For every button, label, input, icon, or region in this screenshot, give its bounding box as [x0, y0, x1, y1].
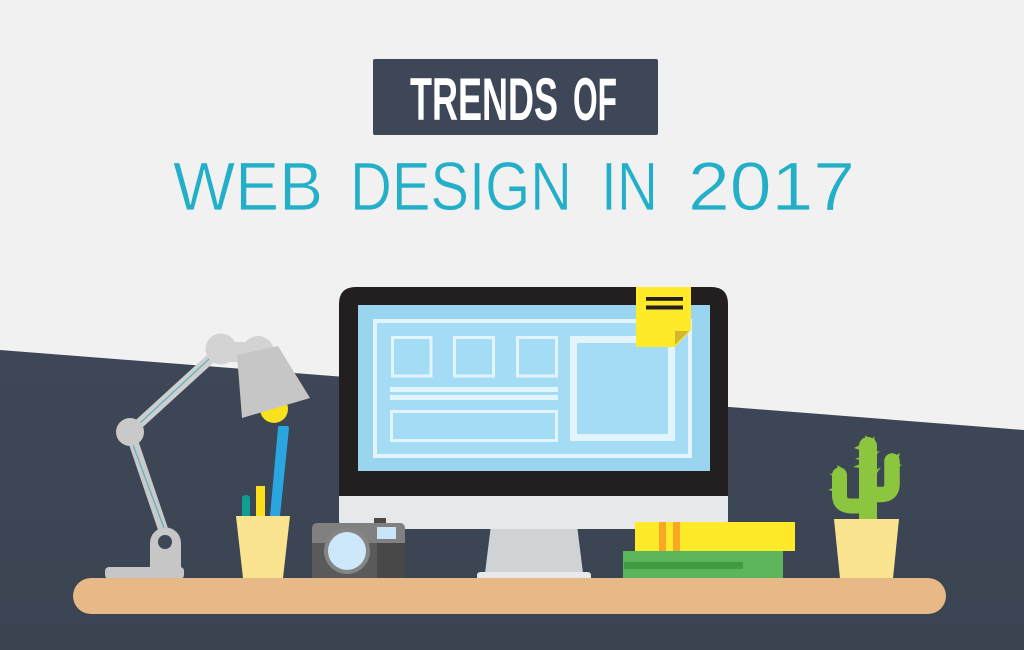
title: trends of: OF — [573, 66, 617, 133]
monitor stand — [477, 525, 591, 578]
camera lens — [324, 528, 370, 574]
desk lamp — [105, 334, 310, 579]
lamp shade — [237, 346, 310, 418]
monitor screen — [358, 305, 710, 471]
subtitle: WEB — [173, 148, 323, 225]
camera right panel — [377, 543, 405, 578]
subtitle: 2017 — [688, 148, 855, 225]
subtitle: DESIGN — [350, 148, 572, 225]
yellow pencil — [256, 486, 265, 517]
plant pot — [834, 519, 899, 578]
monitor — [339, 287, 728, 578]
cup — [236, 516, 290, 578]
book stack — [623, 522, 795, 578]
sticky note — [636, 287, 691, 347]
cactus — [828, 435, 902, 520]
cactus plant — [828, 435, 902, 578]
green book — [623, 551, 783, 578]
blue pencil — [270, 426, 289, 516]
monitor chin — [339, 490, 728, 529]
lamp elbow joint — [116, 418, 144, 446]
thumbnail 3 — [518, 338, 556, 376]
wireframe layout — [375, 321, 690, 456]
subtitle: IN — [601, 148, 658, 225]
lamp bulb — [260, 395, 288, 423]
text lines — [390, 387, 558, 400]
camera top band — [312, 523, 405, 543]
lamp top joints — [206, 334, 274, 368]
title: trends of: TRENDS — [410, 66, 558, 133]
title badge — [373, 59, 658, 135]
lamp upper arm — [130, 349, 221, 432]
thumbnail 1 — [392, 338, 431, 376]
dark diagonal backdrop — [0, 350, 1024, 650]
lamp base — [105, 528, 184, 579]
lamp pivot hole — [158, 535, 172, 549]
large image box — [574, 340, 672, 438]
yellow book — [635, 522, 795, 551]
pencil cup — [236, 426, 290, 578]
thumbnail 2 — [454, 338, 494, 376]
monitor bezel — [339, 287, 728, 496]
camera — [312, 518, 405, 578]
camera body — [312, 523, 405, 578]
wide banner box — [392, 412, 556, 440]
camera window — [377, 527, 396, 539]
teal pencil — [242, 495, 250, 517]
viewfinder bump — [374, 518, 386, 524]
desk top — [73, 578, 946, 614]
lamp lower arm — [130, 432, 165, 535]
